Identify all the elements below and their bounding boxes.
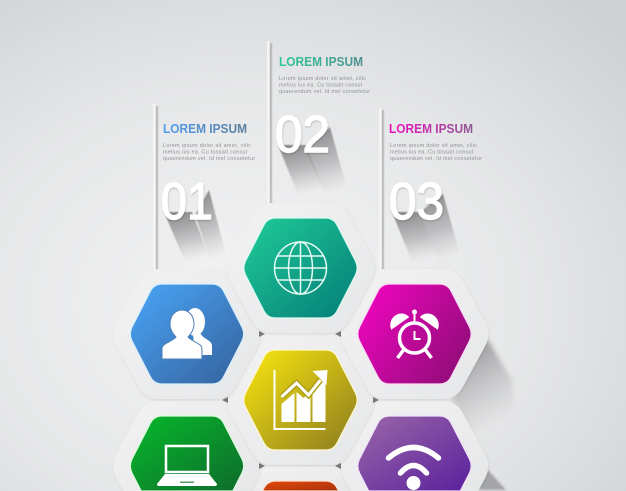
- body text 01: Lorem ipsum dolor sit amet, cilic: [163, 143, 251, 149]
- number 01: 01: [161, 173, 213, 231]
- body text 03: quaerendum vel. Id mel consetetur: [390, 156, 482, 162]
- icon: alarm clock: [391, 310, 438, 358]
- long shadow 02: [278, 127, 349, 198]
- vertical bar 03: [379, 108, 384, 270]
- icon: rising chart: [274, 370, 328, 430]
- hexagon: orange (cropped): [262, 481, 338, 491]
- number 02: 02: [275, 106, 330, 164]
- hexagon plate: yellow: [227, 335, 374, 465]
- icon: laptop: [157, 446, 217, 486]
- icon: people: [162, 308, 212, 359]
- body text 01: quaerendum vel. Id mel consetetur: [163, 156, 255, 162]
- long shadow: purple hexagon: [478, 470, 506, 490]
- body text 02: [279, 76, 370, 95]
- hexagon plate: magenta: [341, 269, 488, 399]
- heading block 02: [279, 55, 370, 95]
- long shadow 03: [392, 194, 462, 264]
- hexagon plate: orange: [245, 466, 356, 491]
- hexagon: blue with people icon: [130, 284, 244, 384]
- heading: lorem ipsum magenta: LOREM IPSUM: [389, 122, 473, 136]
- icon: globe: [274, 242, 326, 294]
- number 03: 03: [389, 173, 444, 231]
- hexagon: purple with wifi icon: [358, 416, 471, 491]
- heading: lorem ipsum blue: LOREM IPSUM: [163, 122, 247, 136]
- hexagon: yellow with chart icon: [244, 350, 357, 450]
- hexagon: magenta with alarm clock icon: [358, 284, 471, 384]
- heading: lorem ipsum teal: LOREM IPSUM: [279, 55, 363, 69]
- heading block 01: [163, 122, 255, 162]
- body text 03: [390, 143, 482, 162]
- body text 01: [163, 143, 255, 162]
- body text 02: quaerendum vel. Id mel consetetur: [279, 89, 370, 95]
- hexagon plate: purple: [341, 401, 488, 491]
- hexagon plate: green: [113, 401, 261, 491]
- heading block 03: [389, 122, 482, 162]
- plate gap marks: [222, 331, 379, 469]
- hexagon plate: teal: [227, 203, 374, 333]
- icon: wifi: [388, 448, 438, 490]
- long shadow 01: [164, 190, 228, 264]
- body text 03: Lorem ipsum dolor sit amet, cilic: [390, 143, 477, 149]
- body text 02: melius ius ea. Cu tossait consul: [279, 82, 362, 88]
- long shadow: magenta hexagon: [452, 340, 516, 438]
- hexagon: green with laptop icon: [130, 416, 244, 491]
- body text 01: melius ius ea. Cu tossait consul: [163, 150, 247, 156]
- hexagon plate: blue: [113, 269, 261, 399]
- vertical bar 01: [153, 104, 158, 270]
- vertical bar 02: [267, 41, 272, 208]
- body text 03: melius ius ea. Cu tossait consul: [390, 150, 473, 156]
- body text 02: Lorem ipsum dolor sit amet, cilic: [279, 76, 366, 82]
- hexagon: teal with globe icon: [244, 218, 357, 318]
